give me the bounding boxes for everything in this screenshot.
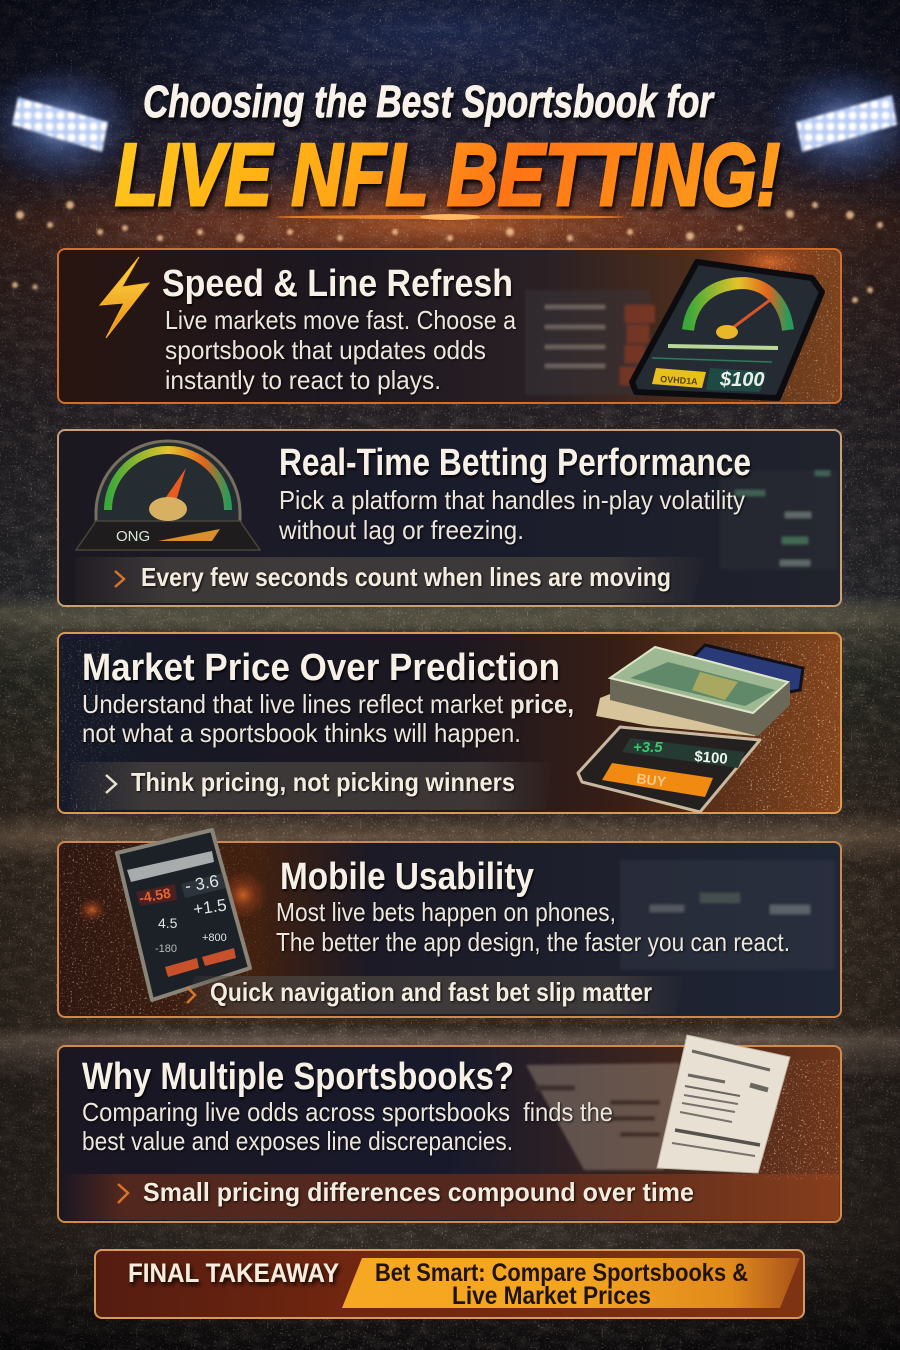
icon: phone with cash stack: BUY — [636, 770, 668, 790]
body text — [82, 1097, 613, 1156]
gold message strip — [342, 1258, 800, 1310]
panel: mobile usability — [58, 830, 841, 1017]
icon: faded odds sheet — [526, 1063, 680, 1170]
gold message strip: Live Market Prices — [452, 1282, 651, 1310]
title: Choosing the Best Sportsbook for — [143, 76, 715, 127]
odds table backdrop — [620, 860, 835, 970]
callout bar: Quick navigation and fast bet slip matter — [210, 977, 652, 1007]
icon: lightning bolt — [100, 257, 149, 338]
panel: why multiple sportsbooks — [58, 1035, 841, 1222]
callout bar: Every few seconds count when lines are moving — [141, 562, 671, 592]
body text — [82, 689, 574, 748]
body text: without lag or freezing. — [278, 515, 524, 545]
panel: speed and line refresh — [58, 232, 841, 403]
panel: market price over prediction — [58, 633, 841, 813]
final takeaway banner — [95, 1250, 804, 1318]
body text — [278, 485, 745, 545]
callout bar — [60, 1174, 839, 1220]
body text: Comparing live odds across sportsbooks finds the — [82, 1097, 613, 1127]
icon: phone with odds: -4.58 — [138, 885, 172, 906]
icon: speedometer gauge — [76, 441, 260, 550]
icon: printed odds sheet — [657, 1035, 790, 1173]
icon: phone with speedometer: OVHD1A — [660, 374, 698, 387]
body text: The better the app design, the faster you can react. — [276, 927, 790, 957]
body text: Live markets move fast. Choose a — [165, 305, 516, 335]
icon: speedometer gauge: ONG — [116, 528, 150, 545]
icon: phone with cash stack: +3.5 — [633, 739, 663, 756]
callout bar — [75, 557, 705, 603]
icon: phone with odds — [117, 830, 250, 1000]
icon: phone with odds: +1.5 — [192, 895, 228, 919]
body text: Most live bets happen on phones, — [276, 897, 616, 927]
heading: Market Price Over Prediction — [82, 647, 560, 689]
callout bar: Think pricing, not picking winners — [131, 767, 515, 797]
icon: phone with odds: +800 — [202, 932, 227, 944]
icon: phone with cash stack: $100 — [694, 748, 728, 768]
body text: not what a sportsbook thinks will happen. — [82, 718, 521, 748]
icon: phone with odds: 4.5 — [158, 915, 178, 931]
icon: phone with speedometer — [632, 262, 822, 398]
icon: phone with speedometer: $100 — [719, 369, 764, 391]
label: FINAL TAKEAWAY — [128, 1258, 339, 1288]
gold message strip: Bet Smart: Compare Sportsbooks & — [375, 1259, 748, 1287]
panel: real-time betting performance — [58, 430, 841, 606]
callout bar — [70, 762, 552, 810]
heading: Speed & Line Refresh — [162, 263, 513, 305]
heading: Why Multiple Sportsbooks? — [82, 1056, 514, 1098]
callout bar: Small pricing differences compound over time — [143, 1177, 694, 1207]
icon: phone with odds: - 3.6 — [183, 871, 220, 896]
body text: Understand that live lines reflect market price, — [82, 689, 574, 719]
body text: Pick a platform that handles in-play volatility — [279, 485, 745, 515]
heading: Mobile Usability — [280, 856, 534, 898]
icon: phone with odds: -180 — [155, 943, 177, 955]
body text — [276, 897, 790, 957]
body text: best value and exposes line discrepancies. — [82, 1126, 513, 1156]
icon: phone with cash stack — [578, 645, 803, 812]
heading: Real-Time Betting Performance — [279, 442, 751, 484]
body text — [165, 305, 516, 395]
body text: instantly to react to plays. — [165, 365, 441, 395]
odds table backdrop — [720, 470, 838, 570]
title — [115, 76, 780, 224]
body text: sportsbook that updates odds — [165, 335, 486, 365]
stadium bokeh lights — [12, 201, 883, 303]
stadium light right — [765, 63, 900, 187]
stadium light left — [0, 63, 140, 187]
odds table backdrop — [525, 290, 655, 395]
